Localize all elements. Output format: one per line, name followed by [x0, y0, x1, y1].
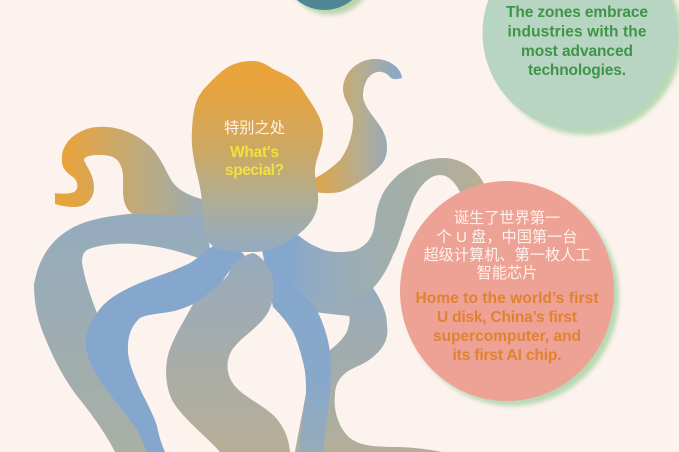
- tentacle: large left arm: [34, 213, 210, 452]
- pink circle Chinese text: [423, 209, 591, 282]
- pink circle English text: Home to the world’s first: [416, 290, 598, 307]
- pink circle English text: [416, 290, 598, 364]
- pink circle Chinese text: 个 U 盘，中国第一台: [437, 228, 577, 246]
- English heading: special?: [225, 162, 284, 179]
- pink circle Chinese text: 智能芯片: [477, 264, 537, 282]
- tentacle: right arm behind circle: [270, 158, 484, 299]
- pink circle Chinese text: 超级计算机、第一枚人工: [423, 246, 591, 264]
- head label: [224, 120, 285, 179]
- pink circle English text: supercomputer, and: [433, 328, 581, 345]
- green circle text: [506, 4, 648, 79]
- octopus head: [192, 61, 323, 252]
- tentacle: upper right arm: [315, 59, 402, 193]
- green circle text: The zones embrace: [506, 4, 648, 21]
- tentacle: blue left arm: [86, 246, 245, 452]
- panel: pink circle: [400, 181, 619, 406]
- pink circle Chinese text: 诞生了世界第一: [454, 209, 560, 227]
- pink circle English text: its first AI chip.: [452, 347, 562, 364]
- English heading: What's: [230, 144, 279, 161]
- tentacle: upper left arm: [55, 127, 205, 216]
- English heading: [225, 144, 284, 179]
- tentacle: blue right arm: [262, 235, 331, 452]
- tentacle: lower right arm: [283, 270, 442, 452]
- panel: green circle: [482, 0, 679, 135]
- green circle text: technologies.: [528, 62, 626, 79]
- pink circle English text: U disk, China’s first: [437, 309, 577, 326]
- teal circle, top edge: [282, 0, 373, 15]
- tentacle: centre arm: [166, 253, 290, 452]
- Chinese heading: 特别之处: [224, 120, 285, 137]
- green circle text: most advanced: [521, 43, 633, 60]
- octopus illustration: [34, 59, 484, 452]
- green circle text: industries with the: [508, 24, 647, 40]
